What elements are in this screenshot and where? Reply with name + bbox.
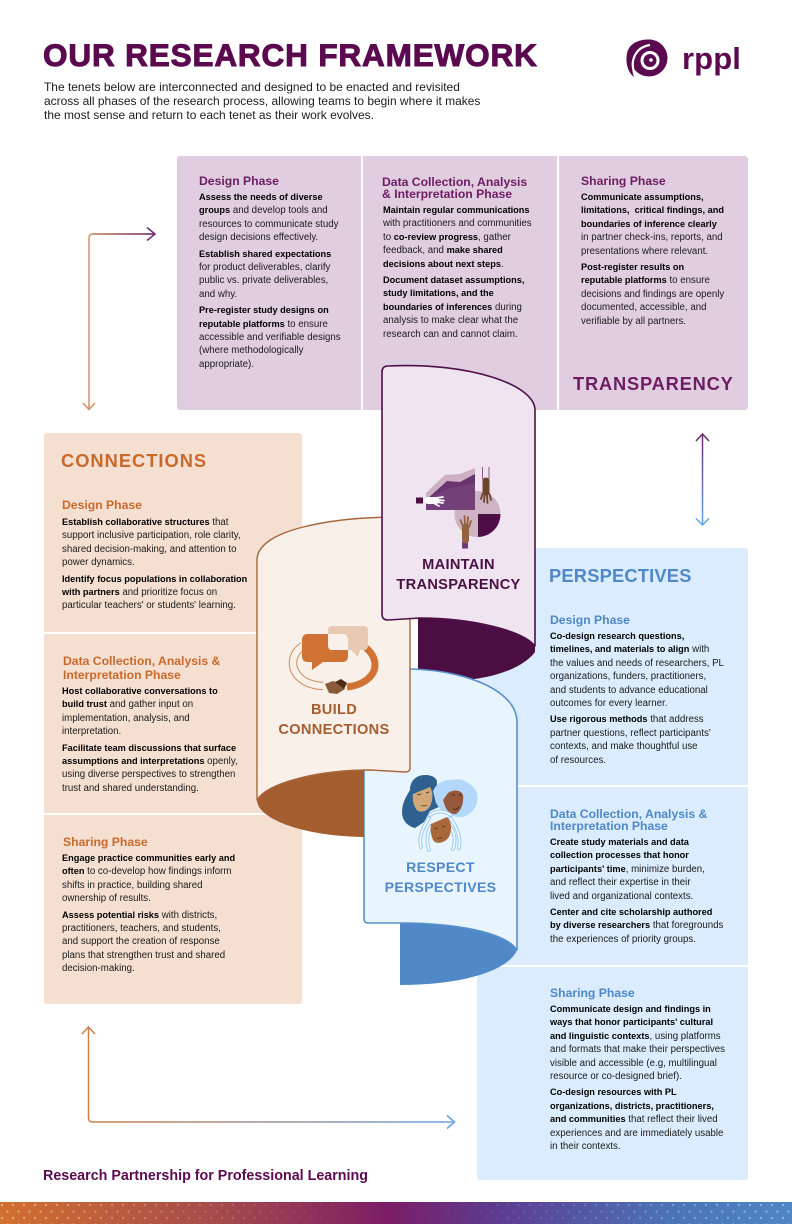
perspectives data phase text: Center and cite scholarship authored	[550, 907, 712, 917]
perspectives data phase text: lived and organizational contexts.	[550, 891, 693, 902]
intro text: The tenets below are interconnected and designed to be enacted and revisited	[44, 80, 460, 94]
transparency data phase text: with practitioners and communities	[383, 218, 532, 229]
maintain scroll underside	[418, 612, 535, 681]
connections sharing phase text: shifts in practice, building shared	[62, 880, 203, 891]
heading: transparency: TRANSPARENCY	[573, 373, 734, 394]
label: build connections: BUILD	[311, 702, 357, 718]
transparency data phase text: research can and cannot claim.	[383, 329, 518, 340]
perspectives sharing phase text: ways that honor participants' cultural	[550, 1017, 713, 1027]
connections data phase heading	[63, 654, 220, 682]
transparency design phase text: Establish shared expectations	[199, 249, 331, 259]
transparency sharing phase text: decisions and findings are openly	[581, 289, 724, 300]
perspectives data phase text: Create study materials and data	[550, 837, 689, 847]
connections design phase text: support inclusive participation, role clarity,	[62, 530, 241, 541]
perspectives sharing phase text: Communicate design and findings in	[550, 1004, 711, 1014]
transparency data phase text	[383, 205, 532, 340]
transparency sharing phase text: verifiable by all partners.	[581, 316, 686, 327]
perspectives data phase text: the experiences of priority groups.	[550, 934, 696, 945]
perspectives sharing phase text: visible and accessible (e.g, multilingual	[550, 1058, 717, 1069]
connections sharing phase heading: Sharing Phase	[63, 835, 148, 849]
transparency sharing phase text: reputable platforms to ensure	[581, 275, 710, 286]
perspectives data phase text: participants' time, minimize burden,	[550, 864, 705, 875]
perspectives design phase text: of resources.	[550, 755, 606, 766]
connections data phase text: Host collaborative conversations to	[62, 686, 218, 696]
perspectives design phase text: contexts, and make thoughtful use	[550, 741, 698, 752]
perspectives sharing phase text: organizations, districts, practitioners,	[550, 1101, 714, 1111]
transparency sharing phase text: documented, accessible, and	[581, 302, 706, 313]
intro text: the most sense and return to each tenet as their work evolves.	[44, 108, 374, 122]
perspectives design phase text: partner questions, reflect participants'	[550, 728, 711, 739]
transparency design phase text: resources to communicate study	[199, 219, 338, 230]
transparency sharing phase text: limitations, critical findings, and	[581, 205, 724, 215]
transparency design phase text: Pre-register study designs on	[199, 305, 329, 315]
title: OUR RESEARCH FRAMEWORK	[43, 37, 538, 73]
transparency design phase text	[199, 192, 341, 370]
perspectives sharing phase heading: Sharing Phase	[550, 986, 635, 1000]
perspectives sharing phase text: in their contexts.	[550, 1141, 621, 1152]
connections design phase text: power dynamics.	[62, 557, 135, 568]
connections data phase text: Facilitate team discussions that surface	[62, 743, 236, 753]
label: maintain transparency: TRANSPARENCY	[396, 577, 521, 593]
connections data phase text	[62, 686, 238, 794]
perspectives data phase text: and reflect their expertise in their	[550, 877, 691, 888]
transparency sharing phase text: presentations where relevant.	[581, 246, 708, 257]
transparency design phase text: appropriate).	[199, 359, 254, 370]
transparency sharing phase text: Communicate assumptions,	[581, 192, 704, 202]
connections data phase text: interpretation.	[62, 726, 121, 737]
perspectives sharing phase text: resource or co-designed brief).	[550, 1071, 682, 1082]
perspectives sharing phase text	[550, 1004, 725, 1152]
transparency sharing phase heading: Sharing Phase	[581, 174, 666, 188]
connections design phase text: Identify focus populations in collaboration	[62, 574, 247, 584]
connections design phase text	[62, 517, 247, 611]
connections design phase text: with partners and prioritize focus on	[62, 587, 217, 598]
perspectives sharing phase text: Co-design resources with PL	[550, 1087, 677, 1097]
respect scroll	[364, 669, 517, 985]
transparency design phase text: groups and develop tools and	[199, 205, 328, 216]
footer gradient band	[0, 1202, 792, 1224]
maintain scroll	[382, 366, 535, 646]
connections data phase text: assumptions and interpretations openly,	[62, 756, 238, 767]
transparency sharing phase text: boundaries of inference clearly	[581, 219, 717, 229]
perspectives data phase text: by diverse researchers that foregrounds	[550, 920, 723, 931]
panel: perspectives	[477, 548, 748, 1180]
transparency data phase heading	[382, 175, 527, 201]
transparency design phase text: Assess the needs of diverse	[199, 192, 323, 202]
panel: connections	[44, 433, 302, 1004]
connections design phase heading: Design Phase	[62, 498, 142, 512]
label: respect perspectives: RESPECT	[406, 859, 475, 875]
transparency sharing phase text: Post-register results on	[581, 262, 684, 272]
perspectives data phase text	[550, 837, 723, 945]
connections design phase text: particular teachers' or students' learning.	[62, 600, 236, 611]
perspectives data phase heading: Data Collection, Analysis &	[550, 807, 707, 821]
perspectives design phase text: organizations, funders, practitioners,	[550, 671, 706, 682]
transparency data phase text: feedback, and make shared	[383, 245, 503, 256]
perspectives sharing phase text: and communities that reflect their lived	[550, 1114, 718, 1125]
perspectives sharing phase text: and linguistic contexts, using platforms	[550, 1031, 721, 1042]
label: maintain transparency	[396, 557, 521, 593]
perspectives design phase text: timelines, and materials to align with	[550, 644, 709, 655]
connections sharing phase text: Assess potential risks with districts,	[62, 910, 217, 921]
connections design phase text: shared decision-making, and attention to	[62, 544, 236, 555]
transparency design phase text: reputable platforms to ensure	[199, 319, 328, 330]
label: maintain transparency: MAINTAIN	[422, 557, 495, 573]
perspectives data phase heading	[550, 807, 707, 833]
label: build connections	[278, 702, 390, 738]
perspectives sharing phase text: experiences and are immediately usable	[550, 1128, 723, 1139]
transparency design phase text: public vs. private deliverables,	[199, 275, 328, 286]
perspectives data phase text: collection processes that honor	[550, 850, 689, 860]
connections data phase text: build trust and gather input on	[62, 699, 193, 710]
perspectives design phase text: and students to advance educational	[550, 685, 708, 696]
intro text: across all phases of the research process, allowing teams to begin where it makes	[44, 94, 480, 108]
connections sharing phase text: decision-making.	[62, 963, 135, 974]
connections data phase text: implementation, analysis, and	[62, 713, 190, 724]
connections sharing phase text: ownership of results.	[62, 893, 151, 904]
connections data phase text: trust and shared understanding.	[62, 783, 199, 794]
logo: rppl: rppl	[682, 41, 741, 76]
connections data phase heading: Data Collection, Analysis &	[63, 654, 220, 668]
transparency data phase text: boundaries of inferences during	[383, 302, 522, 313]
panel: transparency	[177, 156, 748, 410]
perspectives design phase text	[550, 631, 724, 766]
perspectives design phase text: Use rigorous methods that address	[550, 714, 704, 725]
transparency design phase heading: Design Phase	[199, 174, 279, 188]
transparency data phase text: decisions about next steps.	[383, 259, 504, 270]
transparency design phase text: for product deliverables, clarify	[199, 262, 330, 273]
perspectives design phase text: Co-design research questions,	[550, 631, 684, 641]
connections sharing phase text: plans that strengthen trust and shared	[62, 950, 225, 961]
transparency data phase heading: & Interpretation Phase	[382, 187, 512, 201]
label: build connections: CONNECTIONS	[278, 722, 390, 738]
connections sharing phase text: Engage practice communities early and	[62, 853, 235, 863]
transparency sharing phase text	[581, 192, 724, 327]
connections sharing phase text: practitioners, teachers, and students,	[62, 923, 221, 934]
connections scroll	[257, 517, 410, 837]
transparency design phase text: accessible and verifiable designs	[199, 332, 341, 343]
perspectives design phase text: outcomes for every learner.	[550, 698, 667, 709]
connections sharing phase text: often to co-develop how findings inform	[62, 866, 231, 877]
perspectives design phase text: the values and needs of researchers, PL	[550, 658, 724, 669]
label: respect perspectives	[385, 859, 496, 895]
transparency data phase text: Maintain regular communications	[383, 205, 530, 215]
heading: perspectives: PERSPECTIVES	[549, 565, 692, 586]
perspectives design phase heading: Design Phase	[550, 613, 630, 627]
transparency sharing phase text: in partner check-ins, reports, and	[581, 232, 723, 243]
perspectives data phase heading: Interpretation Phase	[550, 819, 668, 833]
footer text: Research Partnership for Professional Learning	[43, 1168, 368, 1184]
transparency data phase text: analysis to make clear what the	[383, 315, 518, 326]
transparency data phase text: to co-review progress, gather	[383, 232, 511, 243]
intro text	[44, 80, 480, 122]
connections data phase text: using diverse perspectives to strengthen	[62, 769, 235, 780]
heading: connections: CONNECTIONS	[61, 450, 207, 471]
connections sharing phase text	[62, 853, 235, 974]
perspectives sharing phase text: and formats that make their perspectives	[550, 1044, 725, 1055]
connections data phase heading: Interpretation Phase	[63, 668, 181, 682]
connections design phase text: Establish collaborative structures that	[62, 517, 228, 528]
transparency design phase text: and why.	[199, 289, 237, 300]
label: respect perspectives: PERSPECTIVES	[385, 879, 496, 895]
transparency design phase text: (where methodologically	[199, 345, 303, 356]
connections sharing phase text: and support the creation of response	[62, 936, 220, 947]
transparency data phase heading: Data Collection, Analysis	[382, 175, 527, 189]
transparency design phase text: design decisions effectively.	[199, 232, 318, 243]
transparency data phase text: Document dataset assumptions,	[383, 275, 524, 285]
transparency data phase text: study limitations, and the	[383, 288, 494, 298]
logo: rppl	[626, 40, 741, 77]
